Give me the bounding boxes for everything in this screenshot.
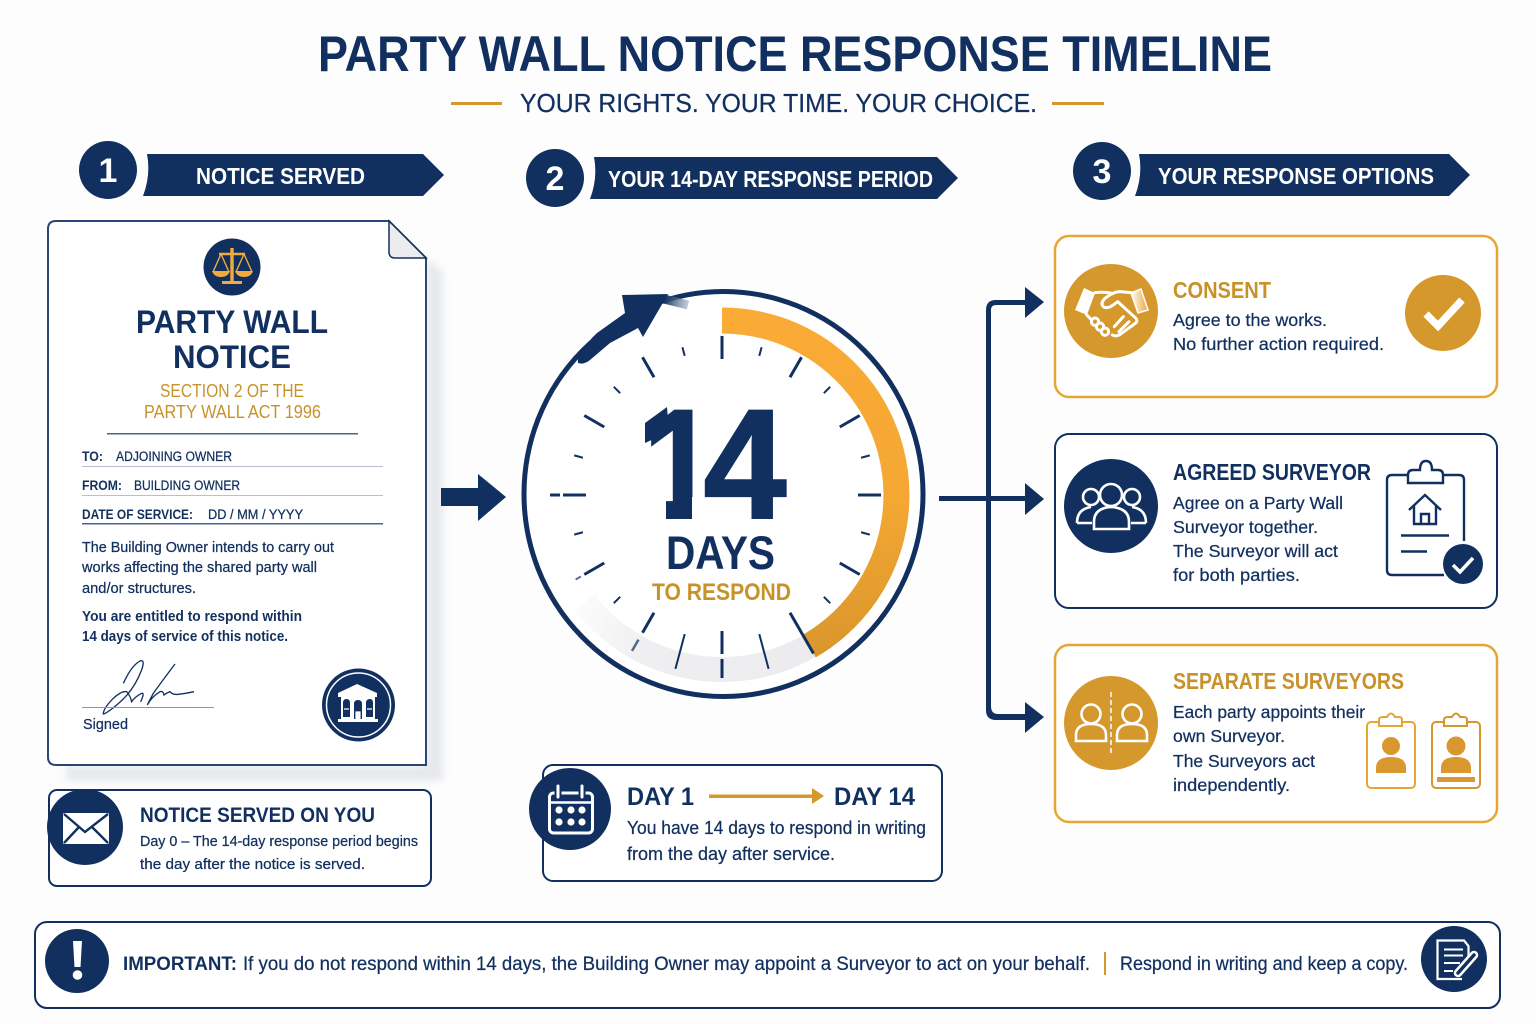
clock caption: TO RESPOND xyxy=(652,579,791,606)
subtitle: YOUR RIGHTS. YOUR TIME. YOUR CHOICE. xyxy=(520,88,1037,118)
notice address fields: FROM: xyxy=(82,478,122,493)
panel: important note xyxy=(35,922,1500,1008)
arrows: branching connector xyxy=(939,287,1044,733)
consent description: No further action required. xyxy=(1173,334,1384,354)
panel: separate surveyors: SEPARATE SURVEYORS xyxy=(1173,668,1404,694)
notice entitlement text: 14 days of service of this notice. xyxy=(82,629,288,645)
icon: two separated people xyxy=(1064,676,1158,770)
notice address fields: TO: xyxy=(82,449,103,464)
chart: 14-day clock xyxy=(524,292,923,696)
signature: Signed xyxy=(83,717,128,733)
notice body text: The Building Owner intends to carry out xyxy=(82,540,334,556)
document heading: NOTICE xyxy=(173,339,291,375)
step 2 header: 2 xyxy=(546,160,564,198)
panel: separate surveyors xyxy=(1055,645,1497,822)
document subheading: SECTION 2 OF THE xyxy=(160,381,304,401)
separate surveyors description: The Surveyors act xyxy=(1173,751,1315,771)
separate surveyors description: independently. xyxy=(1173,775,1290,795)
step 1 header: 1 xyxy=(99,152,117,190)
day range: DAY 1 xyxy=(627,783,694,811)
day range description: You have 14 days to respond in writing xyxy=(627,817,926,838)
notice served description xyxy=(140,833,418,873)
day range description xyxy=(627,817,926,864)
panel: agreed surveyor: AGREED SURVEYOR xyxy=(1173,459,1371,485)
document heading xyxy=(136,304,328,375)
step 2 header: YOUR 14-DAY RESPONSE PERIOD xyxy=(608,166,933,192)
orange 14-day progress arc xyxy=(722,320,896,646)
icon: document and pen xyxy=(1421,926,1487,992)
panel: consent xyxy=(1055,236,1497,397)
step 3 header: 3 xyxy=(1093,153,1111,191)
arrow: notice to response period xyxy=(441,474,506,521)
agreed surveyor description: Surveyor together. xyxy=(1173,517,1318,537)
icon: check mark xyxy=(1405,275,1481,351)
clock ticks xyxy=(550,336,881,678)
notice served description: the day after the notice is served. xyxy=(140,856,365,873)
icon: official seal xyxy=(322,668,395,742)
day range description: from the day after service. xyxy=(627,843,835,864)
consent description xyxy=(1173,310,1384,354)
important message: Respond in writing and keep a copy. xyxy=(1120,954,1408,975)
agreed surveyor description xyxy=(1173,493,1343,585)
notice address fields: BUILDING OWNER xyxy=(134,478,240,493)
icon: scales of justice xyxy=(204,238,260,296)
notice body text xyxy=(81,540,334,597)
clock unit: DAYS xyxy=(666,526,775,579)
day range xyxy=(627,783,915,811)
icon: group of people xyxy=(1064,459,1158,553)
icon: envelope xyxy=(47,789,123,865)
elapsed grey arc xyxy=(584,602,809,670)
step 2 header xyxy=(526,149,958,207)
notice served description: Day 0 – The 14-day response period begins xyxy=(140,833,418,850)
notice body text: works affecting the shared party wall xyxy=(81,560,317,576)
title: PARTY WALL NOTICE RESPONSE TIMELINE xyxy=(318,26,1272,82)
notice body text: and/or structures. xyxy=(82,581,196,597)
icon: surveyor badges xyxy=(1367,714,1480,788)
icon: calendar xyxy=(529,768,611,850)
day range: DAY 14 xyxy=(834,783,915,811)
document heading: PARTY WALL xyxy=(136,304,328,340)
clock number: 1 xyxy=(643,378,716,552)
notice address fields: ADJOINING OWNER xyxy=(116,449,232,464)
notice address fields xyxy=(82,449,383,524)
panel: notice served on you: NOTICE SERVED ON YOU xyxy=(140,804,375,827)
notice entitlement text: You are entitled to respond within xyxy=(82,609,302,625)
icon: clipboard with house xyxy=(1387,461,1483,584)
document subheading xyxy=(144,381,321,422)
signature xyxy=(82,661,214,733)
agreed surveyor description: Agree on a Party Wall xyxy=(1173,493,1343,513)
clock number: 4 xyxy=(704,378,786,552)
separate surveyors description xyxy=(1173,702,1365,795)
consent description: Agree to the works. xyxy=(1173,310,1327,330)
notice entitlement text xyxy=(82,609,302,645)
step 1 header xyxy=(79,141,444,199)
separate surveyors description: own Surveyor. xyxy=(1173,726,1285,746)
panel: party wall notice document xyxy=(48,221,443,781)
separate surveyors description: Each party appoints their xyxy=(1173,702,1365,722)
panel: notice served on you xyxy=(47,789,431,886)
step 1 header: NOTICE SERVED xyxy=(196,163,365,189)
agreed surveyor description: for both parties. xyxy=(1173,565,1300,585)
agreed surveyor description: The Surveyor will act xyxy=(1173,541,1338,561)
notice address fields: DATE OF SERVICE: xyxy=(82,507,193,522)
step 3 header xyxy=(1073,142,1470,200)
countdown arrow xyxy=(578,294,688,364)
clock number xyxy=(645,407,787,519)
document subheading: PARTY WALL ACT 1996 xyxy=(144,402,321,422)
step 3 header: YOUR RESPONSE OPTIONS xyxy=(1158,163,1434,189)
icon: exclamation xyxy=(45,929,109,993)
icon: handshake xyxy=(1064,264,1158,358)
important message xyxy=(123,952,1408,975)
important message: IMPORTANT: xyxy=(123,954,237,975)
important message: If you do not respond within 14 days, the Building Owner may appoint a Surveyor to act on your behalf. xyxy=(243,954,1090,975)
panel: consent: CONSENT xyxy=(1173,277,1271,303)
panel: day 1 to day 14 xyxy=(529,765,942,881)
panel: agreed surveyor xyxy=(1055,434,1497,608)
notice address fields: DD / MM / YYYY xyxy=(208,507,303,522)
